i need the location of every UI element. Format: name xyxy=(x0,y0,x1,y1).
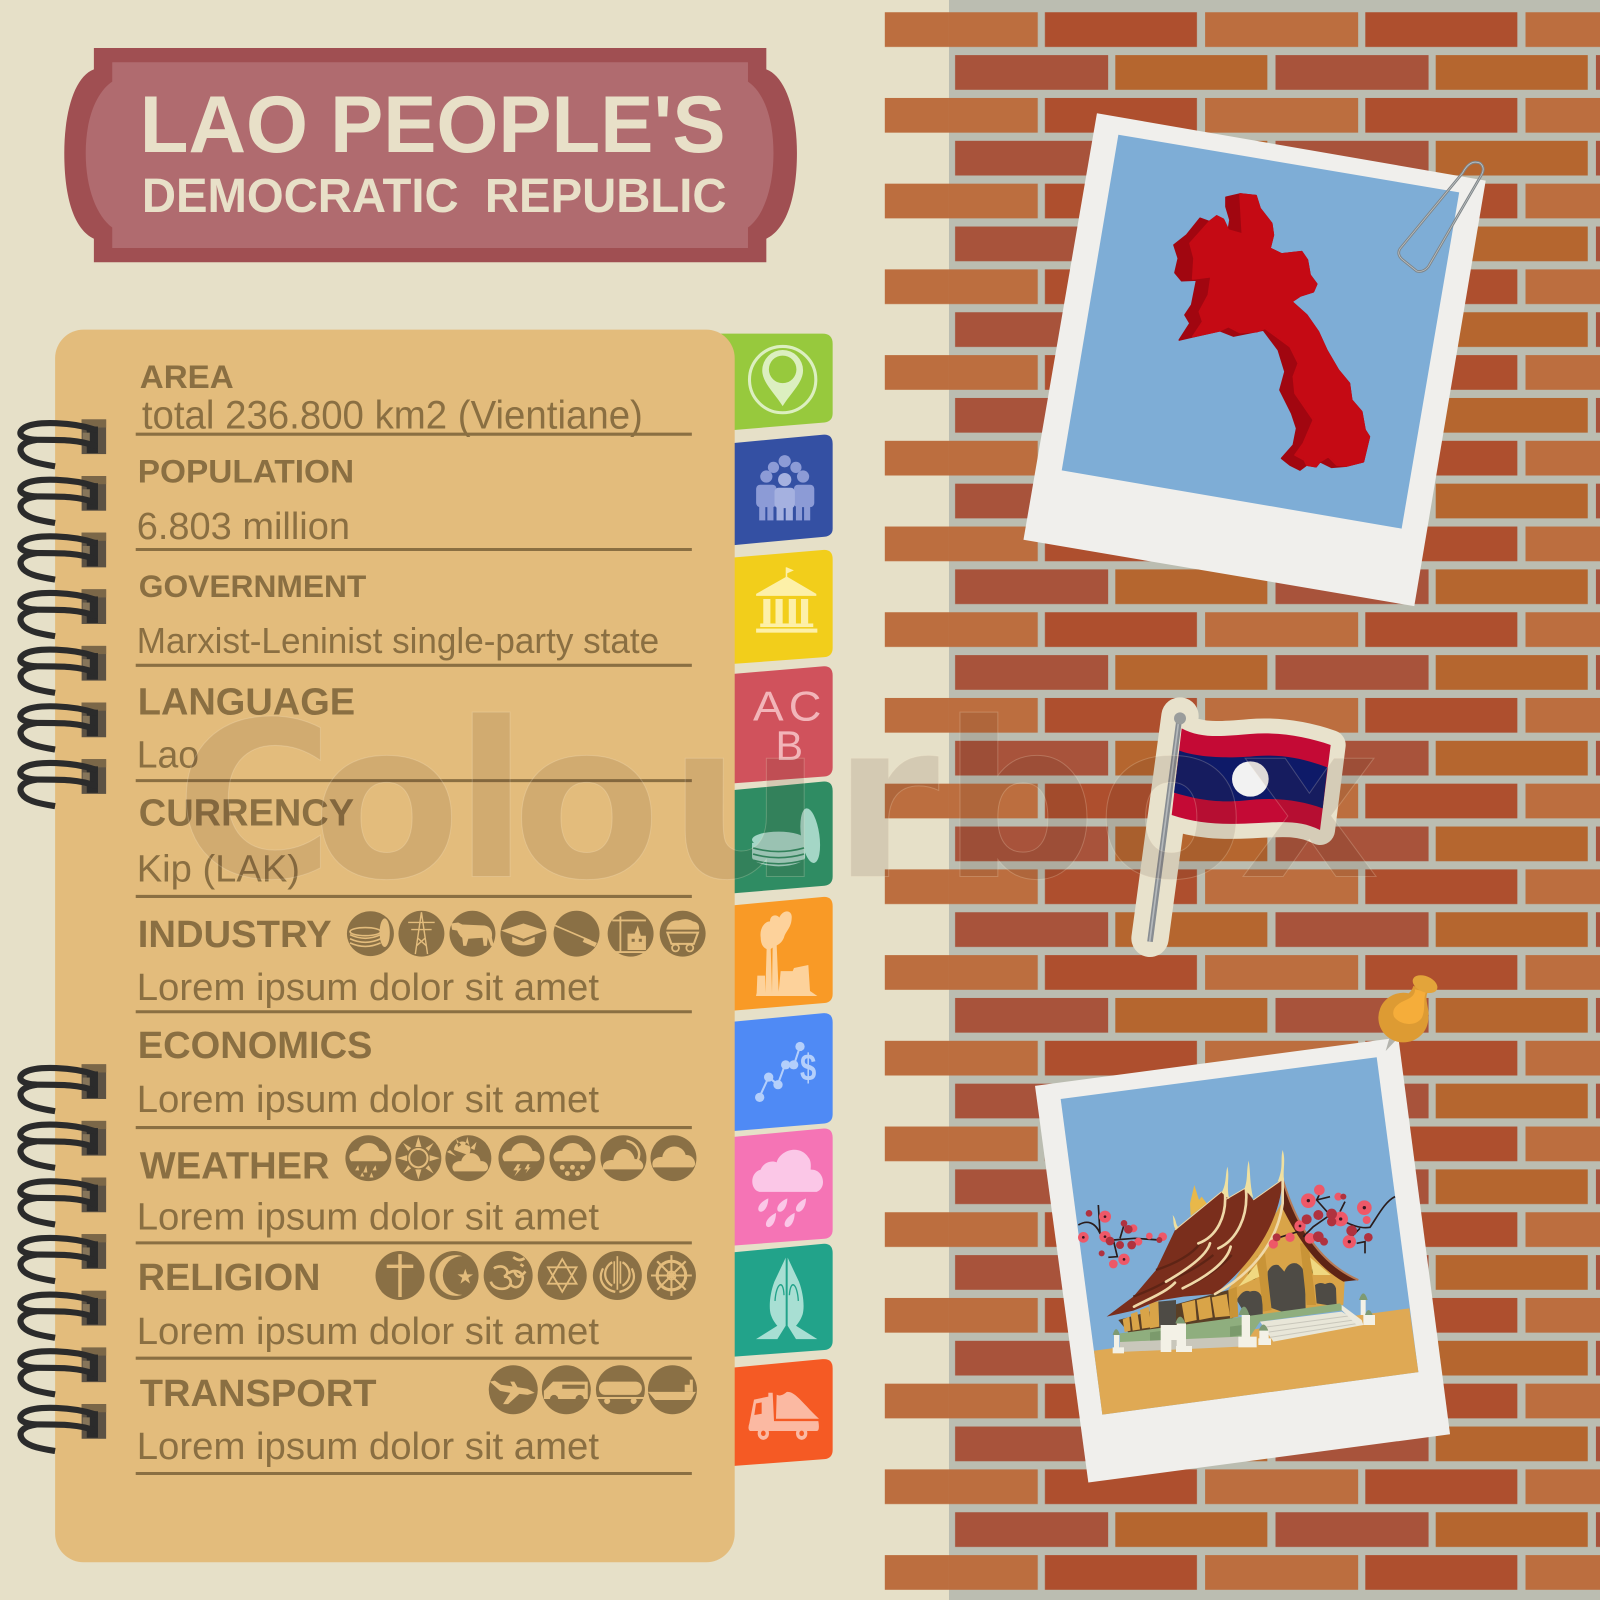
icon: coins xyxy=(347,911,394,956)
icon: moon and cloud xyxy=(601,1135,646,1181)
section: currency: CURRENCY xyxy=(139,792,354,834)
section: language xyxy=(137,680,355,775)
religion icon row xyxy=(376,1251,696,1300)
title banner: LAO PEOPLE'S xyxy=(140,80,726,170)
icon: cargo ship xyxy=(648,1365,697,1414)
watermark: Colourbox xyxy=(176,677,1379,929)
icon: government building xyxy=(756,567,817,633)
notebook panel xyxy=(55,330,735,1562)
section: economics: ECONOMICS xyxy=(138,1024,372,1066)
section: weather xyxy=(137,1145,599,1238)
icon: snow cloud xyxy=(549,1135,595,1181)
section: language: LANGUAGE xyxy=(138,680,355,722)
icon: tank wagon xyxy=(596,1365,645,1414)
spiral binding: upper xyxy=(20,419,106,806)
icon: alphabet letters: C xyxy=(789,682,821,729)
transport icon row xyxy=(489,1365,697,1414)
icon: dharma wheel xyxy=(647,1251,696,1300)
icon: dump truck xyxy=(748,1392,819,1440)
icon: cow xyxy=(449,911,495,957)
section: industry xyxy=(137,913,599,1008)
section: industry: INDUSTRY xyxy=(138,913,332,955)
section: population: 6.803 million xyxy=(137,505,350,547)
icon: storm cloud xyxy=(498,1135,544,1181)
section: language: Lao xyxy=(137,733,199,775)
section: currency xyxy=(137,792,354,890)
section: religion xyxy=(137,1256,599,1352)
polaroid: map of Laos xyxy=(1023,113,1486,606)
flag pole xyxy=(1150,712,1186,942)
icon: crescent and star: ★ xyxy=(456,1265,474,1289)
section: currency: Kip (LAK) xyxy=(137,848,300,890)
icon: alphabet letters: B xyxy=(776,722,803,769)
icon: crescent and star xyxy=(430,1251,479,1300)
icon: mortarboard xyxy=(501,911,546,957)
icon: location pin xyxy=(749,346,816,413)
icon: bus xyxy=(542,1365,591,1414)
icon: growth chart with dollar: $ xyxy=(800,1047,817,1090)
icon: sun behind cloud xyxy=(445,1135,491,1181)
section: government: GOVERNMENT xyxy=(139,568,366,604)
sticker backing xyxy=(1150,716,1331,938)
icon: sun xyxy=(395,1135,441,1181)
icon: alphabet letters: A xyxy=(753,682,784,729)
icon: growth chart with dollar xyxy=(755,1042,817,1102)
icon: rifle xyxy=(554,911,599,957)
cherry blossoms xyxy=(1078,1185,1395,1268)
section: population xyxy=(137,453,354,547)
weather icon row xyxy=(345,1135,696,1181)
icon: rain cloud xyxy=(752,1150,823,1227)
title banner xyxy=(64,48,797,262)
side tabs xyxy=(714,334,833,1467)
section: economics: Lorem ipsum dolor sit amet xyxy=(137,1078,599,1120)
paperclip xyxy=(1399,162,1483,271)
flag of Laos xyxy=(1172,728,1331,830)
industry icon row xyxy=(347,911,706,957)
spiral binding: lower xyxy=(20,1064,106,1451)
icon: star of David xyxy=(538,1251,587,1300)
push pin xyxy=(1378,972,1440,1051)
section: religion: RELIGION xyxy=(138,1256,320,1298)
section: economics xyxy=(137,1024,599,1120)
section: population: POPULATION xyxy=(138,453,354,490)
polaroid: temple xyxy=(1035,972,1450,1483)
icon: people xyxy=(756,455,814,520)
icon: cloud xyxy=(651,1135,696,1181)
section: government: Marxist-Leninist single-party state xyxy=(137,621,659,661)
section: transport xyxy=(137,1372,599,1467)
map of Laos xyxy=(1174,194,1369,470)
icon: crane and building xyxy=(608,911,654,957)
icon: power pylon xyxy=(398,911,444,957)
section: industry: Lorem ipsum dolor sit amet xyxy=(137,966,599,1008)
section: government xyxy=(137,568,659,661)
section: area: AREA xyxy=(140,358,234,395)
section: transport: Lorem ipsum dolor sit amet xyxy=(137,1425,599,1467)
icon: rain cloud xyxy=(345,1135,391,1181)
temple illustration xyxy=(1107,1150,1375,1353)
brick wall xyxy=(885,0,1600,1600)
section: area xyxy=(140,358,643,438)
icon: om xyxy=(484,1251,533,1300)
icon: factory xyxy=(756,911,817,996)
icon: khanda xyxy=(593,1251,642,1300)
icon: cross xyxy=(376,1251,424,1300)
section: religion: Lorem ipsum dolor sit amet xyxy=(137,1310,599,1352)
icon: mine cart xyxy=(660,911,706,957)
icon: alphabet letters xyxy=(753,682,821,769)
title banner: DEMOCRATIC REPUBLIC xyxy=(142,170,727,223)
icon: coins xyxy=(752,807,823,866)
section: area: total 236.800 km2 (Vientiane) xyxy=(142,394,643,438)
icon: airplane xyxy=(489,1365,538,1414)
section: weather: Lorem ipsum dolor sit amet xyxy=(137,1196,599,1238)
photo frame and background xyxy=(1035,1038,1450,1483)
section: weather: WEATHER xyxy=(140,1145,330,1187)
flag sticker xyxy=(1150,712,1331,942)
icon: praying hands xyxy=(756,1258,817,1339)
section: transport: TRANSPORT xyxy=(140,1372,377,1414)
